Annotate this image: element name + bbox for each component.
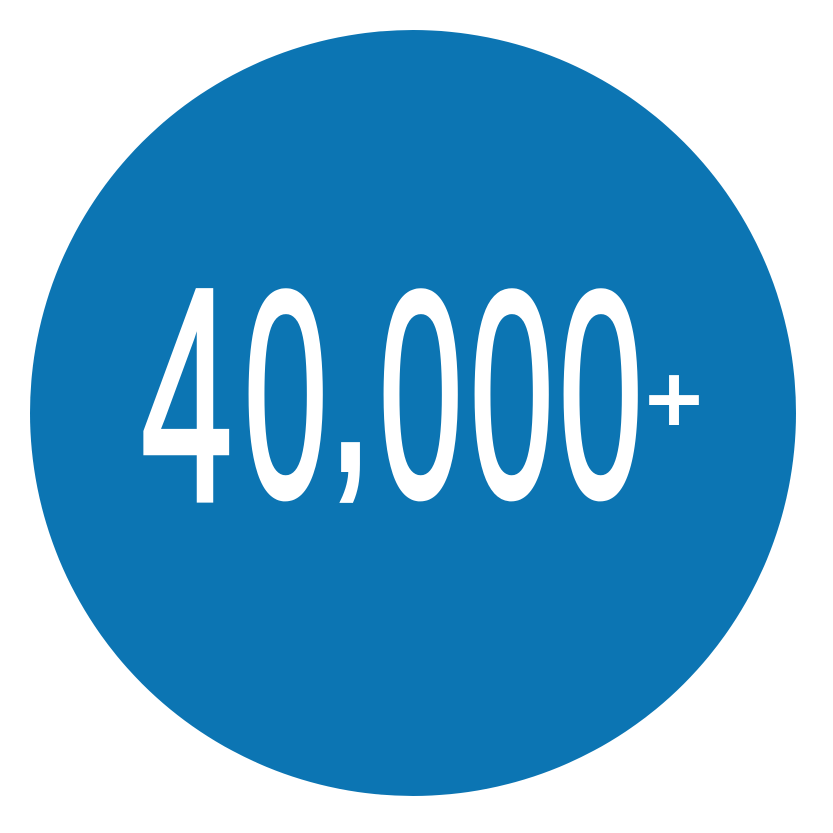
statistic: 40,000+: + <box>646 346 702 453</box>
statistic: 40,000+ <box>141 225 702 565</box>
statistic: 40,000+: 0 <box>559 231 642 559</box>
statistic: 40,000+: 4 <box>141 225 233 565</box>
statistic: 40,000+: 0 <box>379 231 462 559</box>
statistic: 40,000+: , <box>327 252 374 521</box>
statistic: 40,000+: 0 <box>470 231 553 559</box>
statistic: 40,000+: 0 <box>244 231 327 559</box>
